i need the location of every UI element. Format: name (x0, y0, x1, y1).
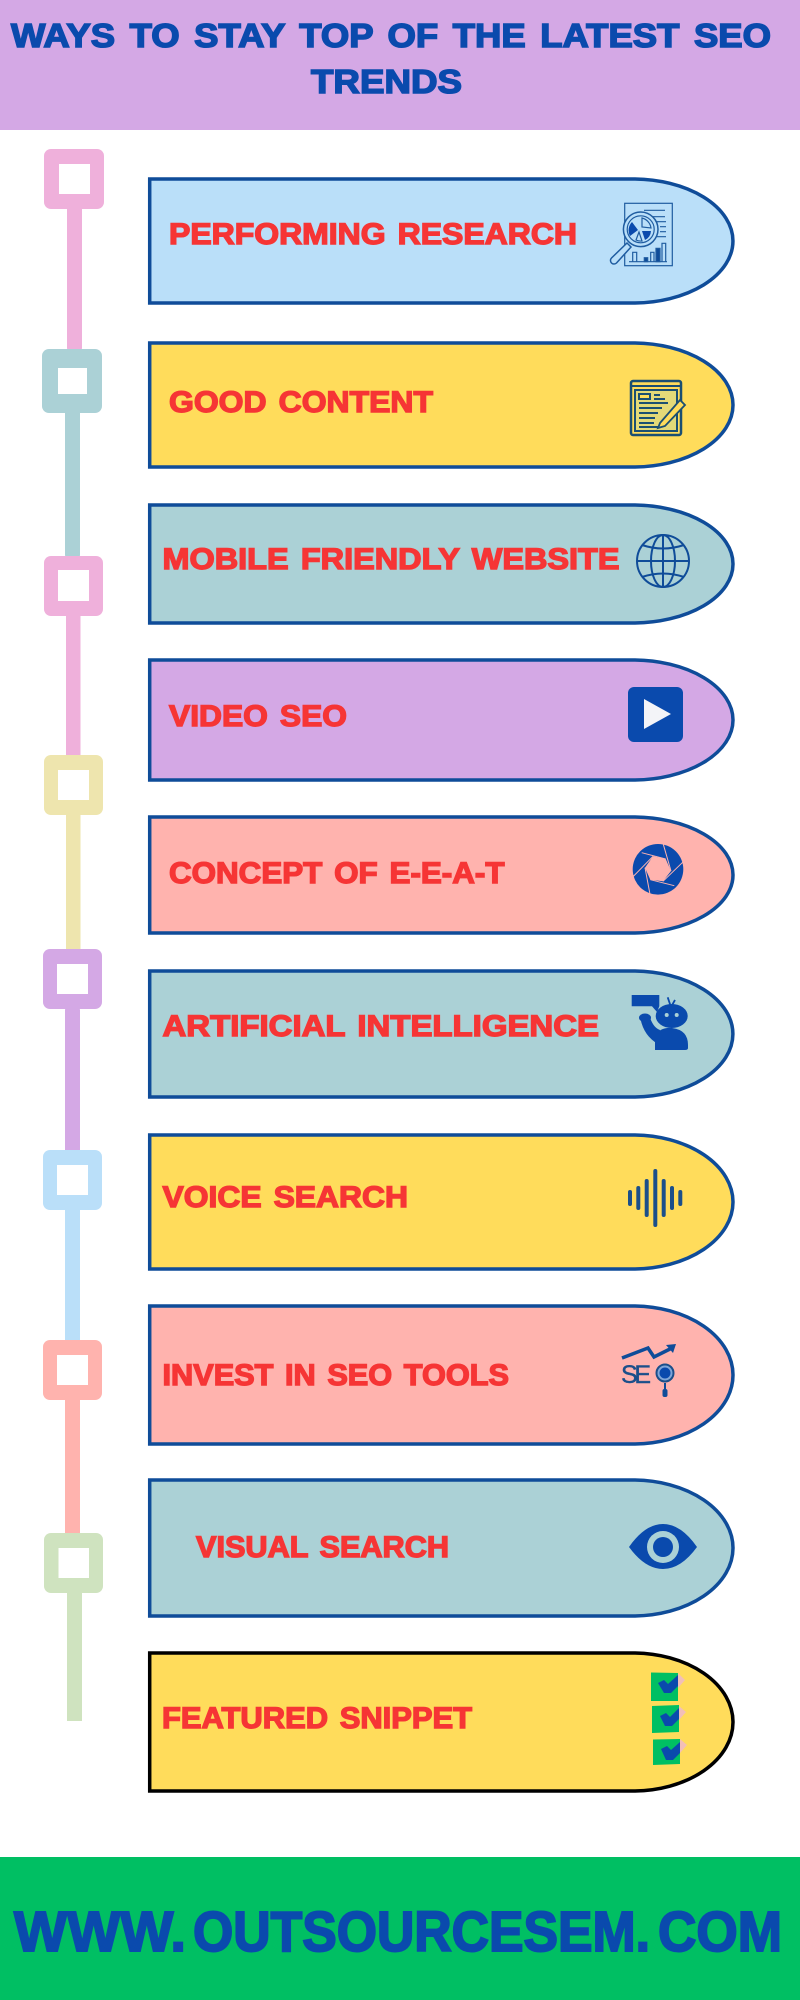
icon: document with pencil (631, 381, 685, 435)
icon: sound wave (628, 1169, 682, 1227)
panel: concept of e-e-a-t (150, 817, 733, 933)
node 8 (44, 1533, 103, 1593)
panel: featured snippet (150, 1653, 733, 1791)
label: mobile friendly website: MOBILE FRIENDLY WEBSITE (162, 543, 620, 576)
node 1 (44, 149, 104, 209)
icon: seo growth magnifier (621, 1344, 676, 1397)
label: voice search: VOICE SEARCH (162, 1181, 408, 1214)
panel: artificial intelligence (150, 971, 733, 1097)
label: good content: GOOD CONTENT (169, 386, 433, 419)
node 6 (43, 1150, 102, 1210)
panel: voice search (150, 1135, 733, 1269)
footer url: OUTSOURCESEM. (193, 1900, 650, 1964)
label: visual search: VISUAL SEARCH (196, 1531, 449, 1564)
panel: invest in seo tools (150, 1306, 733, 1444)
node 7 (43, 1340, 102, 1400)
icon: globe (637, 535, 689, 587)
header banner (0, 0, 800, 130)
icon: seo growth magnifier: SE (621, 1361, 651, 1389)
icon: camera shutter (633, 844, 683, 895)
panel: visual search (150, 1480, 733, 1616)
node 5 (43, 949, 102, 1009)
footer url: WWW. (14, 1900, 186, 1964)
icon: eye (629, 1524, 697, 1569)
node 4 (44, 755, 103, 815)
panel: good content (150, 343, 733, 467)
title: TRENDS (311, 63, 462, 100)
panel: performing research (150, 179, 733, 303)
timeline (42, 149, 104, 1721)
panel: mobile friendly website (150, 505, 733, 623)
panel: video seo (150, 660, 733, 780)
title: WAYS TO STAY TOP OF THE LATEST SEO (11, 17, 771, 54)
label: featured snippet: FEATURED SNIPPET (162, 1702, 472, 1735)
icon: robot with speech bubble (632, 995, 688, 1050)
footer banner (0, 1857, 800, 2000)
icon: play button (628, 687, 683, 742)
label: performing research: PERFORMING RESEARCH (169, 218, 577, 251)
label: video seo: VIDEO SEO (169, 700, 347, 733)
icon: report under magnifier (610, 203, 672, 266)
footer url: COM (658, 1900, 782, 1964)
label: artificial intelligence: ARTIFICIAL INTELLIGENCE (162, 1010, 599, 1043)
node 3 (44, 556, 103, 616)
title (11, 17, 771, 100)
label: concept of e-e-a-t: CONCEPT OF E-E-A-T (169, 857, 504, 890)
icon: checklist (651, 1672, 687, 1765)
node 2 (42, 349, 102, 413)
label: invest in seo tools: INVEST IN SEO TOOLS (162, 1359, 509, 1392)
